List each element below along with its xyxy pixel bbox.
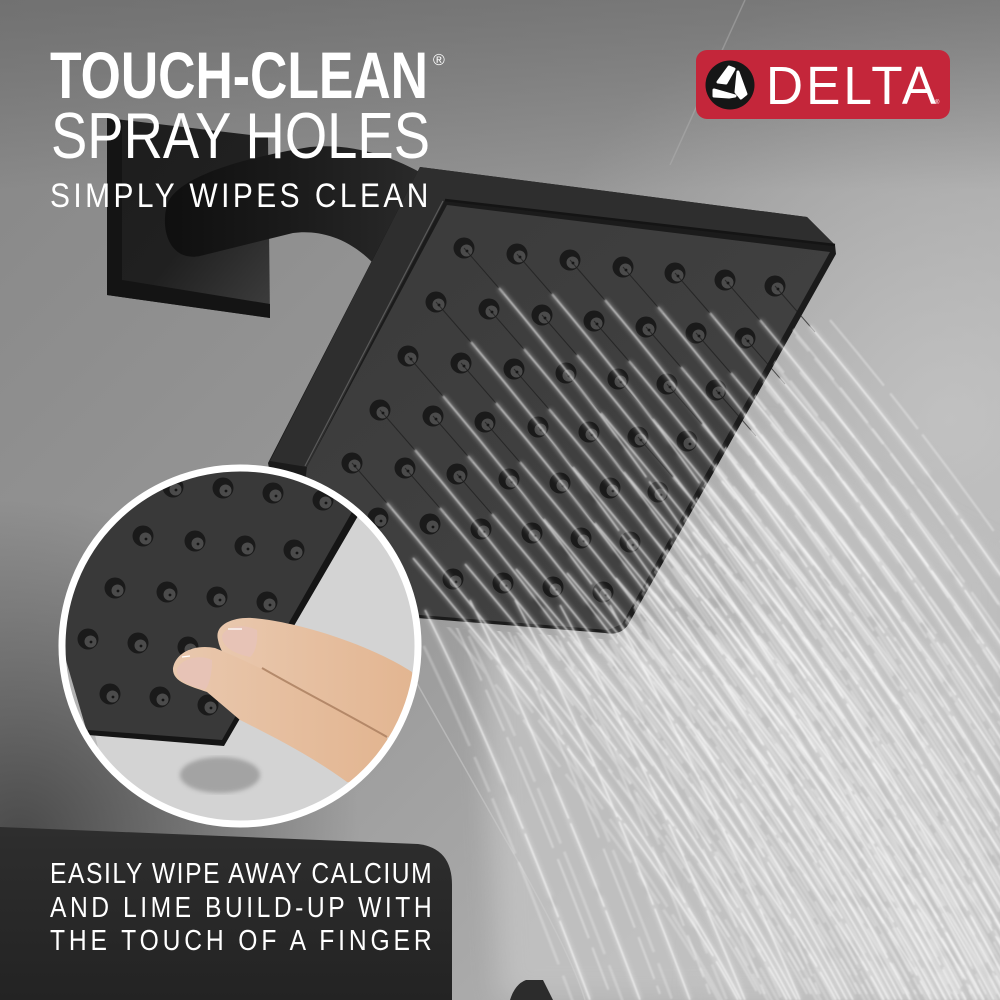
registered mark: ® (935, 99, 940, 106)
description text (50, 857, 432, 956)
inset wall background (66, 661, 98, 748)
shower arm (165, 146, 425, 262)
title: Touch-Clean: ® (433, 52, 445, 69)
inset circle: finger wiping spray holes (60, 460, 440, 840)
shower head face (292, 205, 830, 630)
fingers (173, 618, 425, 790)
icon: Delta triangle mark (706, 60, 754, 110)
water spray streams (352, 248, 1000, 1000)
spray nozzles (342, 238, 786, 602)
bottom dark panel (0, 827, 553, 1000)
shower head body (268, 167, 836, 634)
subtitle: SIMPLY WIPES CLEAN (50, 176, 428, 214)
description text: EASILY WIPE AWAY CALCIUM (50, 857, 432, 889)
title: Touch-Clean: TOUCH-CLEAN (50, 38, 428, 112)
inset nozzles (78, 476, 334, 716)
Delta logo badge (696, 50, 950, 119)
description text: AND LIME BUILD-UP WITH (50, 891, 432, 923)
inset head plate (60, 460, 362, 743)
title: Spray Holes: SPRAY HOLES (51, 99, 430, 172)
wordmark: DELTA (766, 56, 937, 116)
wall mount flange (107, 118, 270, 318)
description text: THE TOUCH OF A FINGER (50, 924, 432, 956)
